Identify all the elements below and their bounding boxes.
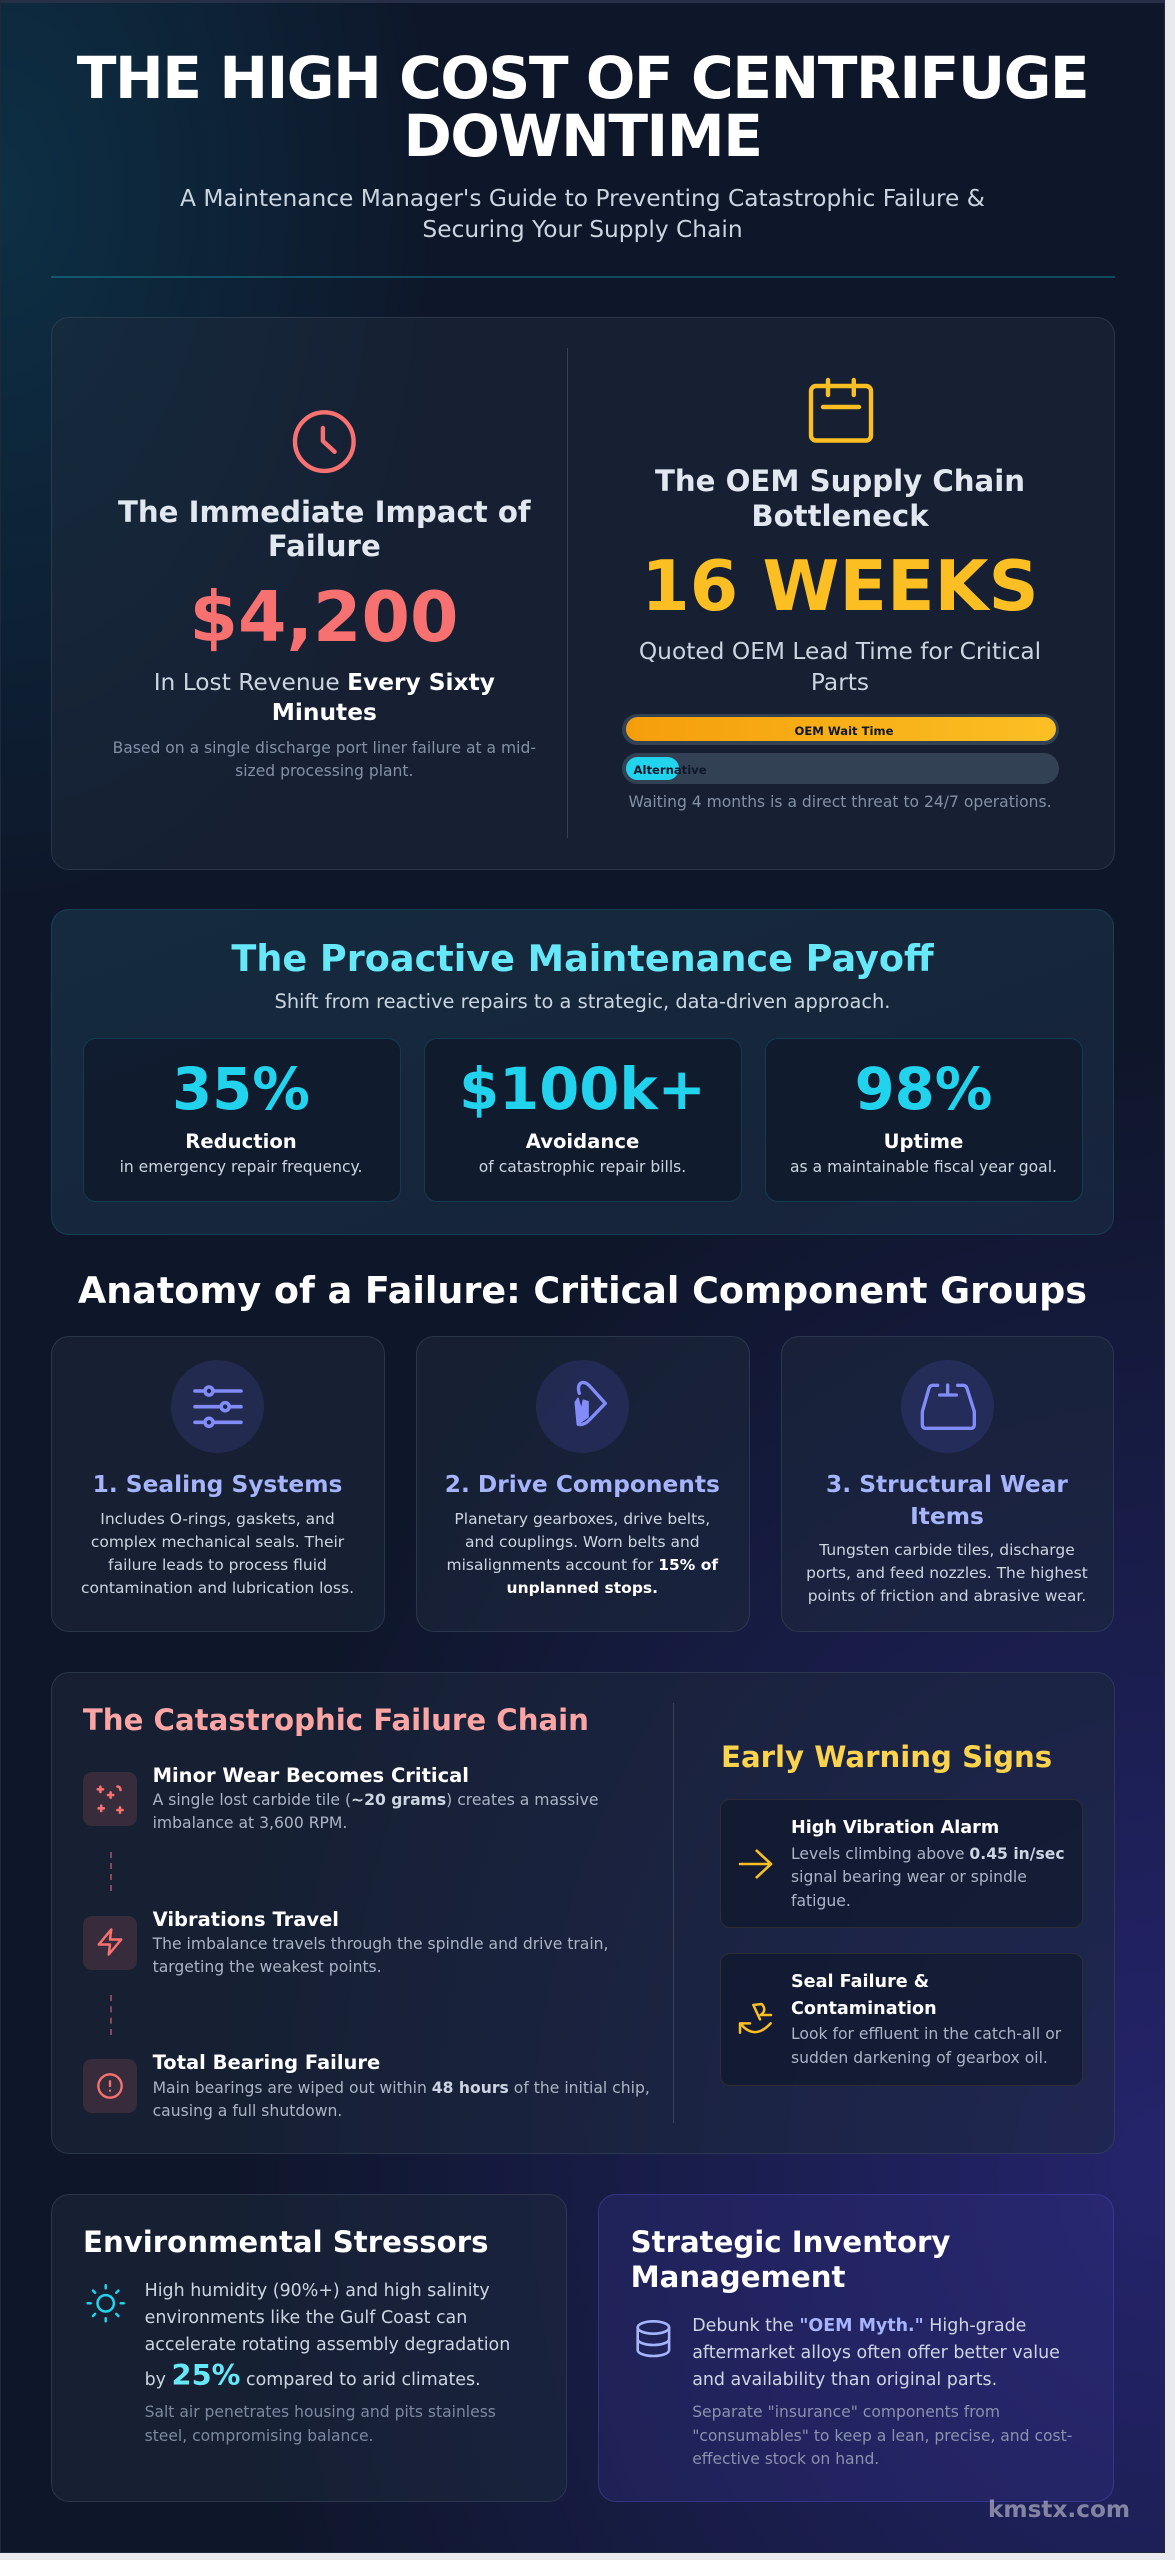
warning 1 text: signal bearing wear or spindle [791, 1868, 1027, 1886]
text: uptime detail: as a maintainable fiscal year goal. [790, 1158, 1057, 1176]
heading: catastrophic failure chain: The Catastrophic Failure Chain [83, 1703, 589, 1737]
text: sealing systems: contamination and lubrication loss. [81, 1579, 354, 1597]
label: uptime: Uptime [884, 1130, 963, 1153]
note: basis of estimate: sized processing plant. [235, 762, 413, 780]
icon: sun [86, 2284, 125, 2322]
heading: immediate impact: Failure [268, 529, 381, 563]
heading: structural wear items [826, 1471, 1068, 1530]
icon: calendar [808, 378, 874, 443]
text: every sixty minutes: In Lost Revenue Every Sixty [154, 669, 495, 696]
note: insurance vs consumables: Separate "insurance" components from [692, 2403, 1000, 2421]
stat: sixteen weeks: 16 WEEKS [641, 546, 1039, 627]
heading: immediate impact: The Immediate Impact of [118, 495, 531, 529]
subtitle [180, 185, 985, 243]
warning 1 text: fatigue. [791, 1892, 851, 1910]
step 1 text: A single lost carbide tile (~20 grams) creates a massive [153, 1791, 598, 1809]
step 3 title: Total Bearing Failure [153, 2051, 380, 2074]
text: drive components: Planetary gearboxes, drive belts, [454, 1510, 710, 1528]
bar: oem wait time [622, 714, 1059, 745]
step icon: lightning [83, 1916, 137, 1970]
note: insurance vs consumables: effective stock on hand. [692, 2450, 879, 2468]
card: reduction [83, 1038, 401, 1202]
text: structural wear items: ports, and feed nozzles. The highest [806, 1564, 1088, 1582]
card: avoidance [424, 1038, 742, 1202]
step 2 text: The imbalance travels through the spindle and drive train, [153, 1935, 609, 1953]
text: drive components [446, 1510, 718, 1597]
heading: sealing systems: 1. Sealing Systems [93, 1471, 342, 1498]
text: humidity and salinity: accelerate rotating assembly degradation [145, 2335, 510, 2355]
heading: anatomy of a failure: Anatomy of a Failure: Critical Component Groups [78, 1269, 1087, 1312]
panel: environmental stressors [51, 2194, 567, 2502]
text: every sixty minutes [154, 669, 495, 726]
note: direct threat: Waiting 4 months is a direct threat to 24/7 operations. [628, 793, 1052, 811]
bar: alternative [622, 752, 1059, 784]
text: sealing systems: Includes O-rings, gaskets, and [100, 1510, 335, 1528]
text: quoted lead time: Quoted OEM Lead Time for Critical [639, 638, 1041, 665]
text: structural wear items: Tungsten carbide tiles, discharge [819, 1541, 1075, 1559]
text: quoted lead time: Parts [811, 669, 869, 696]
icon: database [636, 2320, 670, 2358]
subtitle: A Maintenance Manager's Guide to Preventing Catastrophic Failure & [180, 185, 985, 212]
warning 1 text: Levels climbing above 0.45 in/sec [791, 1845, 1065, 1863]
heading: immediate impact [118, 495, 531, 563]
text: drive components: unplanned stops. [507, 1579, 658, 1597]
note: salt air: Salt air penetrates housing and pits stainless [145, 2403, 496, 2421]
heading: strategic inventory [631, 2225, 950, 2294]
warning 2 title [791, 1972, 937, 2019]
text: humidity and salinity: environments like the Gulf Coast can [145, 2308, 467, 2328]
note: salt air: steel, compromising balance. [145, 2427, 373, 2445]
title [77, 44, 1088, 170]
panel: structural wear items [781, 1336, 1114, 1632]
text: structural wear items: points of friction and abrasive wear. [808, 1587, 1086, 1605]
text: sealing systems [81, 1510, 354, 1597]
label: avoidance: Avoidance [526, 1130, 639, 1153]
icon: drive belt [574, 1380, 608, 1426]
text: sealing systems: complex mechanical seals. Their [91, 1533, 344, 1551]
stat: 35 percent: 35% [172, 1056, 310, 1123]
panel: failure chain and warning signs [50, 1672, 1114, 2154]
callout: seal failure [720, 1953, 1083, 2086]
icon: refresh [738, 2002, 772, 2034]
step 3 text: causing a full shutdown. [153, 2102, 342, 2120]
stat: 98 percent: 98% [855, 1056, 992, 1123]
step 1 text [152, 1791, 598, 1832]
warning 1 title: High Vibration Alarm [791, 1818, 999, 1838]
step 3 text [153, 2079, 650, 2120]
text: drive components: and couplings. Worn belts and [465, 1533, 700, 1551]
card: uptime [765, 1038, 1083, 1202]
watermark: kmstx.com [988, 2496, 1130, 2523]
note: insurance vs consumables [692, 2403, 1072, 2468]
bar: oem wait time: OEM Wait Time [795, 724, 893, 738]
icon: wear housing [920, 1383, 976, 1430]
bar: alternative: Alternative [634, 763, 707, 777]
note: salt air [145, 2403, 496, 2445]
heading: oem bottleneck: The OEM Supply Chain [655, 464, 1025, 498]
heading: structural wear items: Items [910, 1503, 984, 1530]
panel: proactive maintenance payoff [50, 909, 1114, 1235]
warning 2 text: Look for effluent in the catch-all or [791, 2025, 1061, 2043]
step 1 text: imbalance at 3,600 RPM. [153, 1814, 347, 1832]
heading: environmental stressors: Environmental Stressors [83, 2225, 489, 2259]
step icon: alert [83, 2059, 137, 2113]
step icon: scattered chips [83, 1772, 137, 1826]
note: insurance vs consumables: "consumables" to keep a lean, precise, and cost- [692, 2427, 1072, 2445]
heading: oem bottleneck: Bottleneck [751, 499, 929, 533]
label: reduction: Reduction [185, 1130, 297, 1153]
heading: strategic inventory: Strategic Inventory [631, 2225, 950, 2259]
title: DOWNTIME [404, 102, 762, 170]
warning 2 text: sudden darkening of gearbox oil. [791, 2049, 1048, 2067]
step 2 text: targeting the weakest points. [153, 1958, 382, 1976]
heading: strategic inventory: Management [631, 2260, 845, 2294]
subtitle: Securing Your Supply Chain [422, 216, 743, 243]
icon: arrow [738, 1849, 772, 1879]
text: payoff subtitle: Shift from reactive repairs to a strategic, data-driven approach. [275, 990, 890, 1012]
text: oem myth: and availability than original parts. [692, 2370, 997, 2390]
panel: sealing systems [50, 1336, 384, 1632]
step 3 text: Main bearings are wiped out within 48 hours of the initial chip, [153, 2079, 650, 2097]
heading: structural wear items: 3. Structural Wear [826, 1471, 1068, 1498]
callout: high vibration alarm [720, 1799, 1083, 1928]
text: avoidance detail: of catastrophic repair bills. [479, 1158, 686, 1176]
step 2 text [152, 1935, 609, 1976]
step 2 title: Vibrations Travel [153, 1908, 339, 1931]
heading: oem bottleneck [655, 464, 1025, 533]
text: oem myth: Debunk the "OEM Myth." High-grade [692, 2316, 1026, 2336]
warning 2 text [791, 2025, 1062, 2067]
text: structural wear items [806, 1541, 1088, 1605]
text: oem myth: aftermarket alloys often offer better value [692, 2343, 1060, 2363]
step 1 title: Minor Wear Becomes Critical [153, 1764, 469, 1787]
warning 1 text [791, 1845, 1065, 1910]
panel: strategic inventory management [598, 2194, 1114, 2502]
heading: payoff: The Proactive Maintenance Payoff [231, 937, 934, 980]
text: oem myth [692, 2316, 1060, 2390]
stat: lost revenue: $4,200 [190, 577, 458, 658]
stat: 100k: $100k+ [459, 1056, 706, 1123]
title: THE HIGH COST OF CENTRIFUGE [77, 44, 1088, 112]
text: reduction detail: in emergency repair frequency. [120, 1158, 362, 1176]
text: drive components: misalignments account for 15% of [446, 1556, 718, 1574]
text: 25 percent: by 25% compared to arid climates. [145, 2358, 481, 2392]
panel: impact and supply chain [50, 316, 1115, 870]
text: humidity and salinity [145, 2281, 510, 2355]
icon: clock [292, 410, 356, 474]
note: basis of estimate [113, 739, 536, 780]
heading: drive components: 2. Drive Components [445, 1471, 720, 1498]
panel: drive components [416, 1336, 750, 1632]
warning 2 title: Contamination [791, 1999, 937, 2019]
text: quoted lead time [639, 638, 1041, 696]
note: basis of estimate: Based on a single discharge port liner failure at a mid- [113, 739, 536, 757]
icon: sliders [193, 1385, 243, 1428]
warning 2 title: Seal Failure & [791, 1972, 929, 1992]
text: sealing systems: failure leads to process fluid [108, 1556, 327, 1574]
text: every sixty minutes: Minutes [272, 699, 377, 726]
text: humidity and salinity: High humidity (90%+) and high salinity [145, 2281, 490, 2301]
heading: early warning signs: Early Warning Signs [721, 1740, 1052, 1774]
